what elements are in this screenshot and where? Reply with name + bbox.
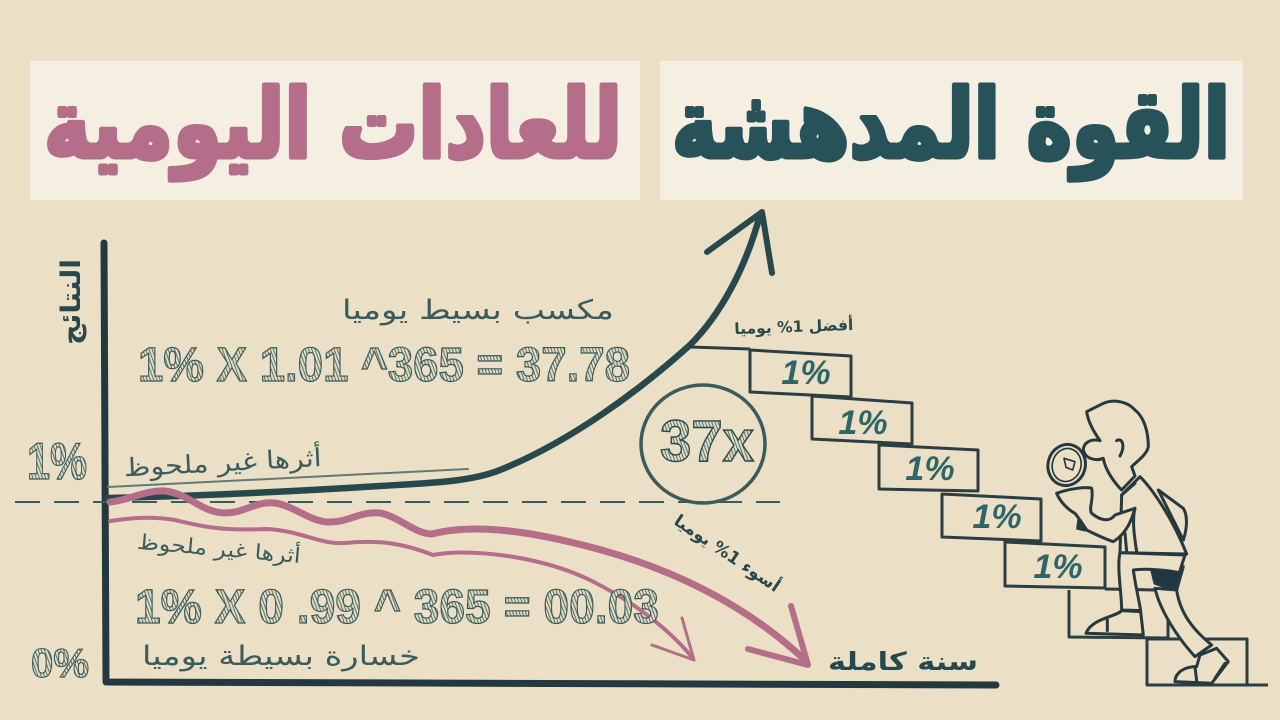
- baseline dashed line: [15, 501, 780, 503]
- front leg and shirt hem: [1119, 553, 1185, 611]
- title panel: the amazing power: [660, 61, 1243, 200]
- shirt: [1120, 477, 1187, 554]
- brick 3: [879, 445, 978, 491]
- decline curves with arrows: [110, 491, 808, 665]
- y axis label: 1%: 1%: [27, 433, 87, 491]
- rear leg: [1155, 588, 1212, 657]
- x axis label: a whole year: سنة كاملة: [828, 647, 978, 676]
- label: worse 1% daily: أسوء 1% يوميا: [670, 509, 785, 597]
- chart axes: [104, 243, 996, 685]
- brick 2: 1%: [838, 404, 888, 442]
- shorts: [1152, 567, 1183, 590]
- backpack: [1158, 490, 1186, 540]
- y axis label: 0%: 0%: [31, 640, 89, 686]
- gain label: small daily gain: مكسب بسيط يوميا: [342, 295, 614, 326]
- note: unnoticeable effect (gain): أثرها غير ملحوظ: [123, 440, 322, 482]
- brick 4: 1%: [972, 498, 1022, 536]
- note: unnoticeable effect (loss): أثرها غير ملحوظ: [136, 528, 302, 568]
- brick 5: 1%: [1033, 548, 1083, 586]
- y axis label: results: النتائج: [56, 259, 87, 345]
- hand and arm: [1057, 488, 1135, 542]
- brick 4: [942, 494, 1041, 541]
- head and hair: [1083, 401, 1148, 490]
- badge: 37x: [641, 385, 765, 503]
- brick 1: 1%: [781, 354, 831, 392]
- brick 5: [1005, 542, 1105, 588]
- title text: of daily habits: للعادات اليومية: [44, 70, 622, 180]
- brick 3: 1%: [905, 450, 955, 488]
- character climbing stairs with magnifying glass: [1043, 401, 1228, 683]
- gain formula: 1% X 1.01 ^365 = 37.78: [138, 339, 630, 392]
- loss formula: 1% X 0 .99 ^ 365 = 00.03: [135, 581, 659, 634]
- brick 1: [750, 350, 851, 397]
- front shoe: [1086, 611, 1143, 635]
- growth curve with arrow: [108, 212, 772, 498]
- rear shoe: [1175, 648, 1228, 683]
- staircase of 1% bricks: [690, 347, 1268, 685]
- title panel: of daily habits: [30, 61, 640, 200]
- lower steps: [1069, 589, 1168, 638]
- label: better 1% daily: أفضل 1% يوميا: [734, 315, 854, 338]
- brick 2: [812, 396, 912, 444]
- badge: 37x: 37x: [660, 409, 754, 474]
- loss label: small daily loss: خسارة بسيطة يوميا: [142, 641, 420, 672]
- magnifying glass: [1043, 440, 1090, 530]
